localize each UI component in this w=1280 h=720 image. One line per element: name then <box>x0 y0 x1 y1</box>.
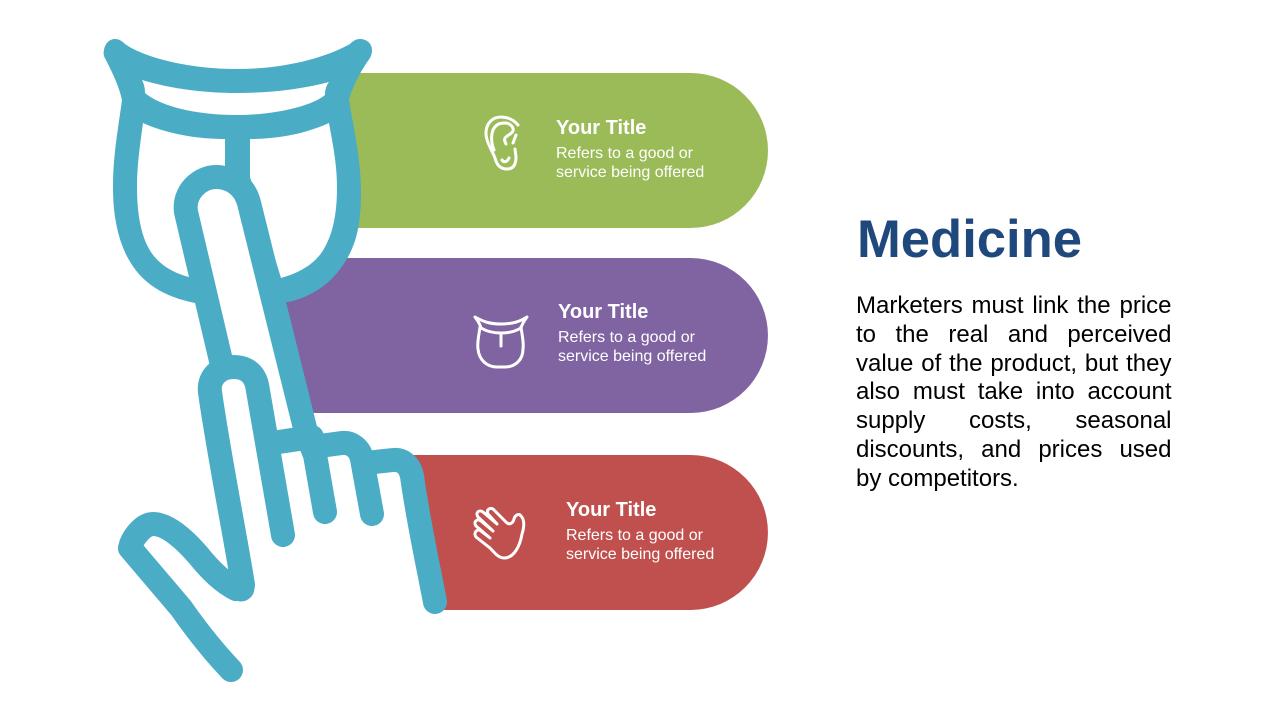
panel: green pill <box>345 73 768 228</box>
text: purple pill title: Your Title <box>558 301 648 323</box>
text: green pill title: Your Title <box>556 117 646 139</box>
text: green pill description: service being offered <box>556 164 704 181</box>
tongue silhouette with cut-outs <box>104 39 372 303</box>
text: green pill description: Refers to a good or <box>556 145 693 162</box>
panel: purple pill <box>284 258 768 413</box>
text: red pill description: service being offered <box>566 546 714 563</box>
panel: red pill <box>405 455 768 610</box>
text: red pill description: Refers to a good or <box>566 527 703 544</box>
pointing hand outline <box>130 177 435 670</box>
text block: description: Marketers must link the price to the real and perceived value of the product, but they also must take into account supply costs, seasonal discounts, and prices used by competitors. <box>856 292 1172 492</box>
illustration: tongue and pointing hand <box>104 39 435 670</box>
heading: Medicine: Medicine <box>857 210 1082 269</box>
icon: waving hand <box>475 508 524 558</box>
icon: ear <box>486 117 518 169</box>
icon: tongue <box>475 317 527 367</box>
text: red pill title: Your Title <box>566 499 656 521</box>
text: purple pill description: Refers to a good or <box>558 329 695 346</box>
thumb base rounding <box>228 574 254 602</box>
text: purple pill description: service being offered <box>558 348 706 365</box>
